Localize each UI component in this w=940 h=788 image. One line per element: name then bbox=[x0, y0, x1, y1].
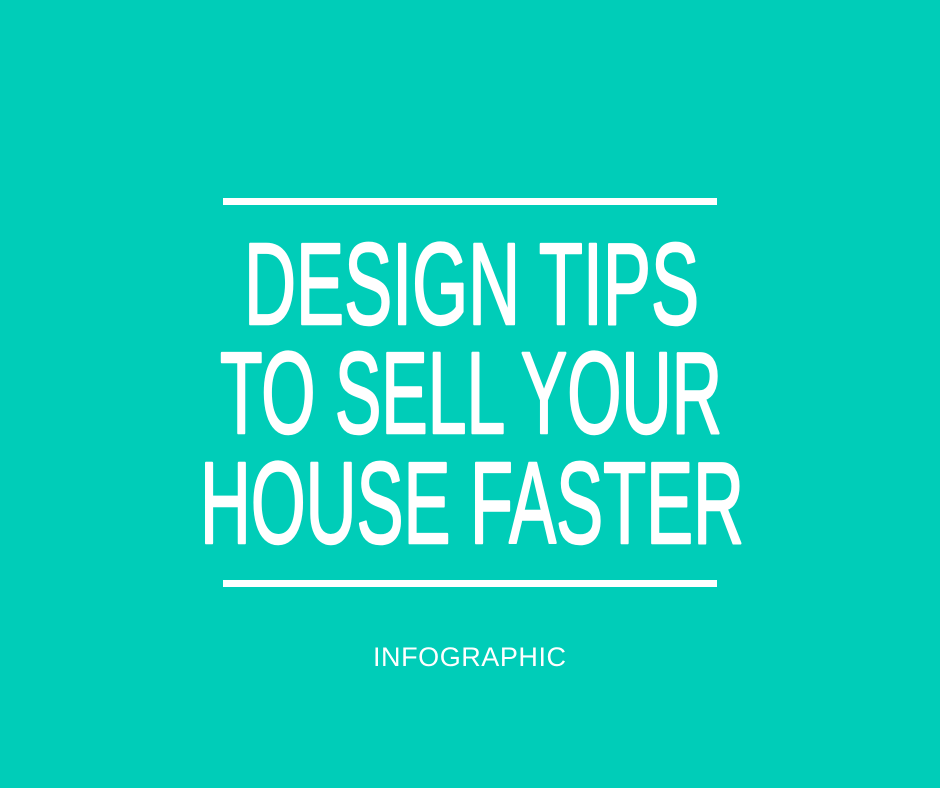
subtitle: INFOGRAPHIC bbox=[373, 642, 566, 672]
title bbox=[200, 219, 744, 568]
